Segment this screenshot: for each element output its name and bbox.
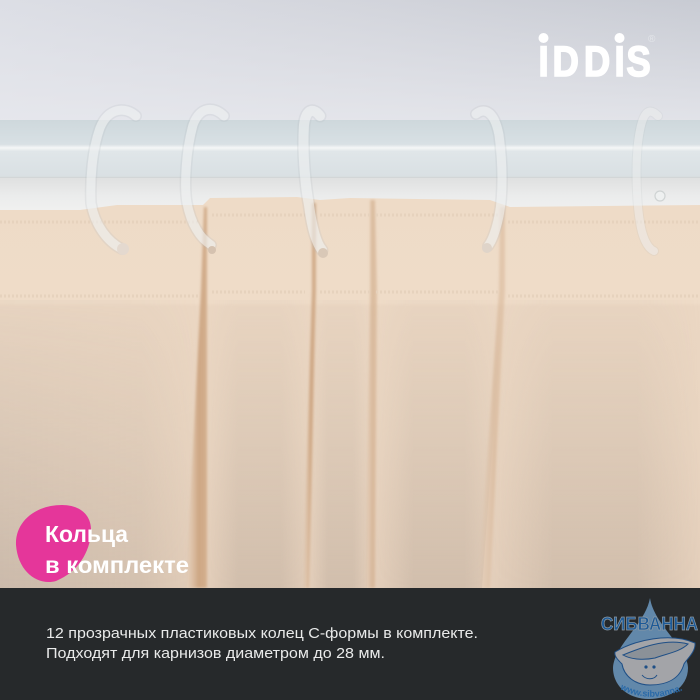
ring 1: [91, 110, 136, 255]
water drop: [613, 598, 688, 699]
curtain folds: [186, 200, 505, 588]
footer panel: [0, 588, 700, 700]
badge text: Кольца: [45, 521, 128, 547]
watermark url: www.sibvanna.ru: [621, 684, 682, 697]
badge text: в комплекте: [45, 552, 189, 578]
clear liner under rod: [0, 176, 700, 216]
curtain stitching: [0, 215, 700, 296]
footer description: Подходят для карнизов диаметром до 28 мм.: [46, 645, 385, 662]
footer description: 12 прозрачных пластиковых колец С-формы в комплекте.: [46, 625, 478, 642]
badge: rings included: [16, 505, 189, 582]
curtain rod: [0, 120, 700, 178]
brand logo: IDDIS: ®: [648, 34, 656, 45]
pink blob: [16, 505, 91, 582]
ring 4: [476, 111, 502, 253]
curtain: [0, 197, 700, 588]
ring 3: [303, 111, 328, 258]
bathtub: [615, 638, 695, 685]
ring 2: [186, 109, 224, 254]
wall background: [0, 0, 700, 121]
ring 5: [637, 112, 665, 251]
brand logo: IDDIS: IDDIS: [539, 38, 651, 86]
shower rings: [91, 109, 665, 258]
curtain panel shading: [0, 348, 674, 588]
